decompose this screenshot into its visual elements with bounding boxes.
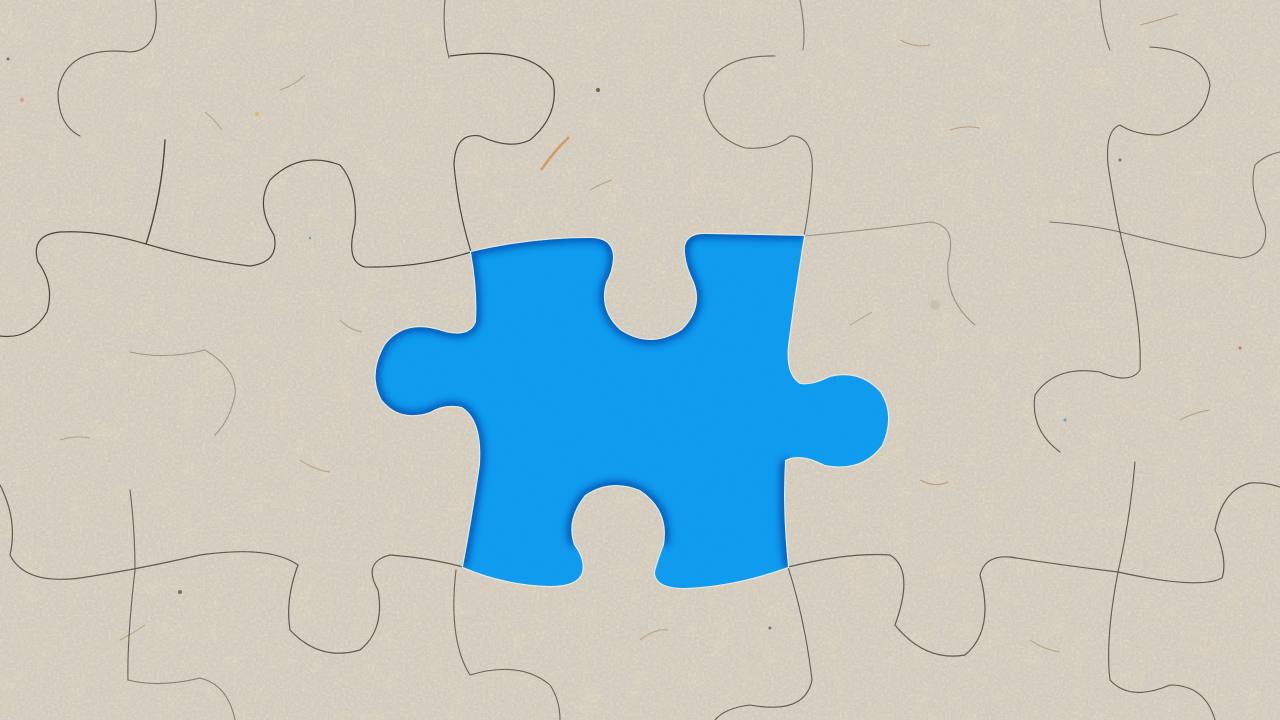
hole rim highlight [376,234,888,588]
inner shadow along hole edge [376,234,804,567]
missing piece: blue hole [376,234,888,588]
